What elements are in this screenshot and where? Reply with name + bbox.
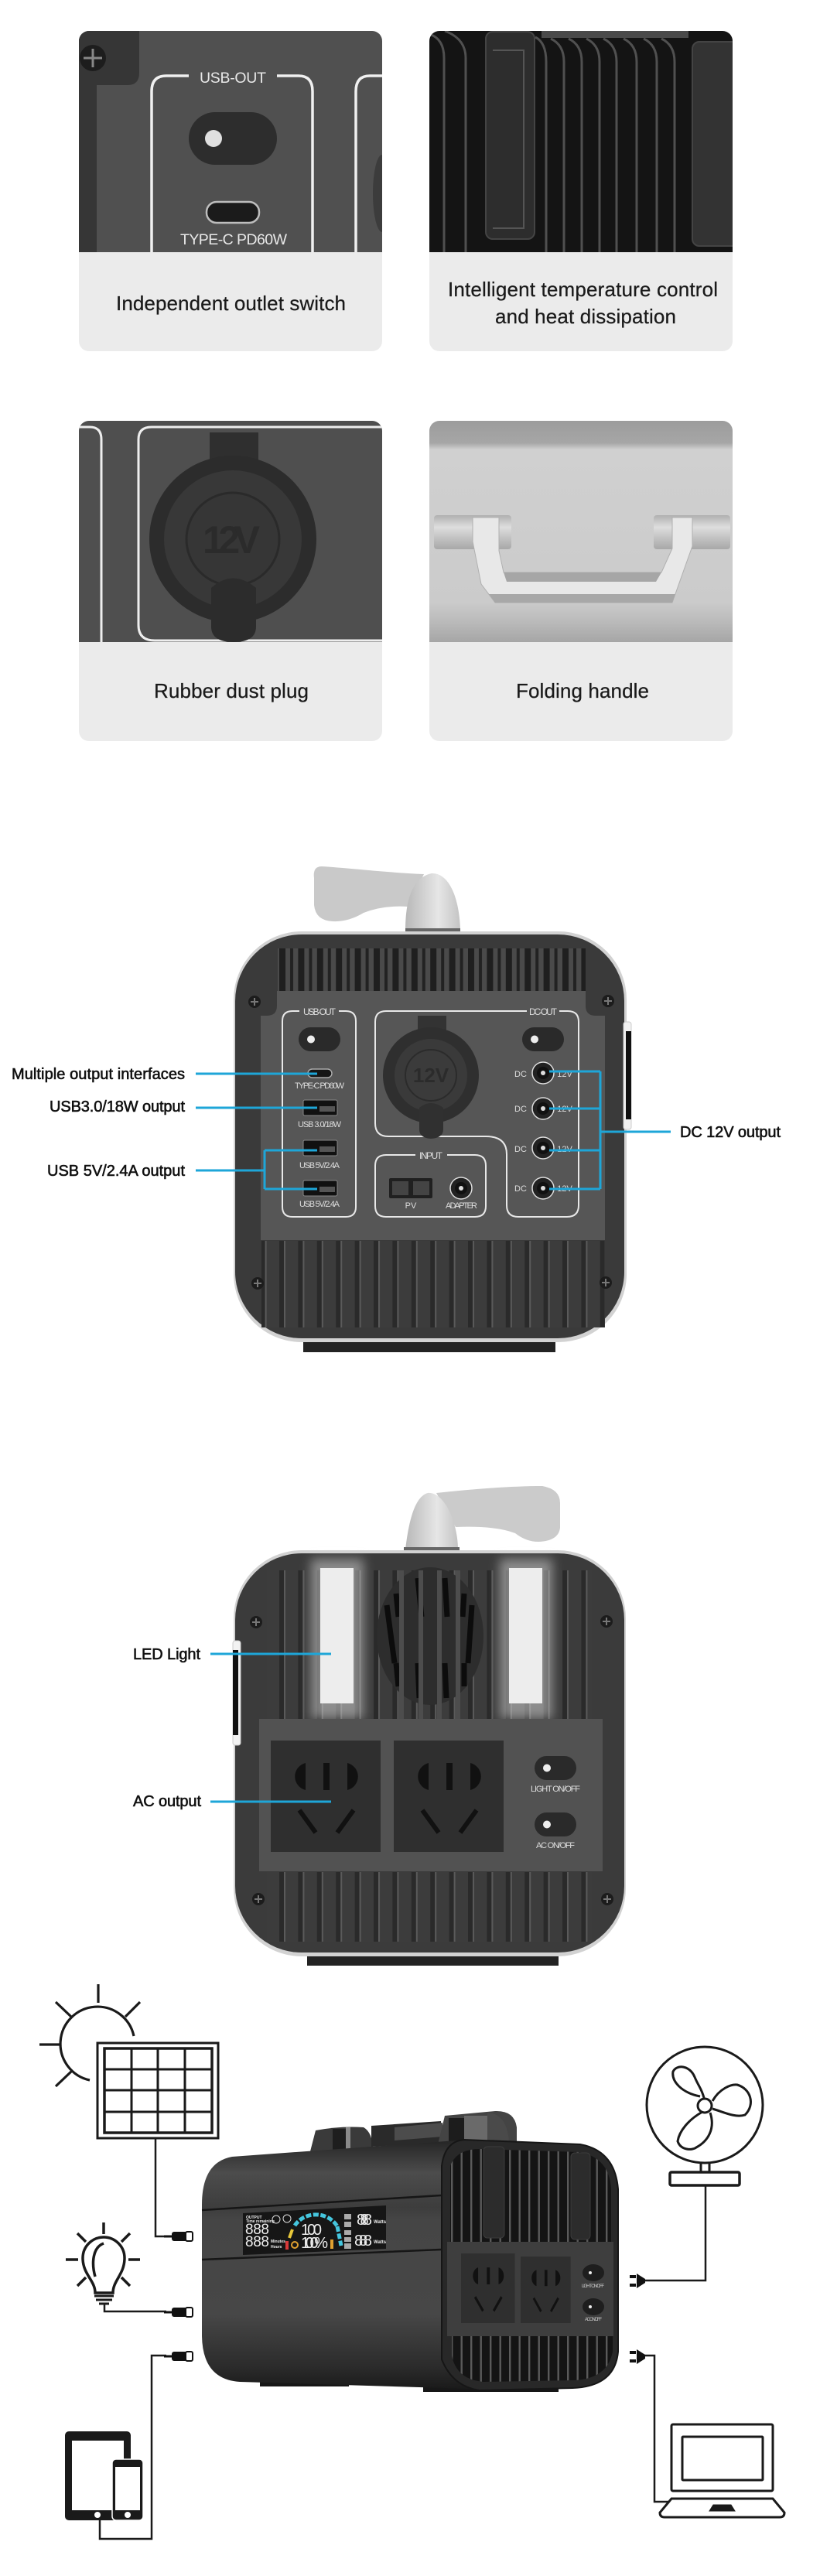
INPUT group: INPUT xyxy=(419,1150,443,1161)
panel: folding handle card xyxy=(429,421,733,741)
label: USB3.0/18W output: USB3.0/18W output xyxy=(50,1098,185,1115)
main body side xyxy=(202,2140,472,2389)
panel: temperature control card: and heat dissipation xyxy=(495,305,676,328)
DC-OUT group: DC xyxy=(514,1145,527,1154)
control panel xyxy=(261,991,605,1240)
LCD display: 888 xyxy=(354,2233,372,2250)
icon: sun xyxy=(39,1984,140,2086)
wire: fan to unit xyxy=(630,2185,706,2288)
bottom fins xyxy=(267,1872,592,1942)
label: LED Light: LED Light xyxy=(133,1646,200,1663)
inner body xyxy=(235,934,624,1338)
side handle xyxy=(624,1022,631,1129)
second AC socket xyxy=(521,2257,571,2323)
bottom foot xyxy=(307,1949,559,1966)
carry handle xyxy=(314,866,460,931)
INPUT group xyxy=(375,1150,486,1217)
panel: independent outlet switch card xyxy=(79,31,391,351)
LCD display: 100% xyxy=(301,2235,328,2252)
LCD display: Watts xyxy=(374,2220,387,2225)
AC socket right xyxy=(394,1741,504,1852)
LCD display: OUTPUT xyxy=(246,2216,262,2220)
switches xyxy=(582,2264,604,2322)
callout lines: front view xyxy=(210,1654,331,1802)
screws xyxy=(250,1615,613,1905)
caption text: Intelligent temperature control xyxy=(448,278,718,301)
INPUT group: PV xyxy=(405,1201,417,1211)
LCD display: 888 xyxy=(245,2222,269,2238)
USB-OUT group: USB-OUT xyxy=(303,1006,337,1017)
LED light right xyxy=(500,1559,552,1719)
caption background xyxy=(429,642,733,741)
USB-OUT group: TYPE-C PD60W xyxy=(295,1081,345,1091)
USB-OUT group: USB 5V/2.4A xyxy=(299,1200,340,1209)
body seams xyxy=(202,2195,441,2260)
top fins xyxy=(267,1570,592,1719)
LCD display: 888 xyxy=(245,2234,269,2250)
control panel xyxy=(259,1719,603,1871)
top handle xyxy=(309,2111,517,2154)
carry handle xyxy=(404,1486,560,1550)
bottom fins xyxy=(261,1241,605,1327)
AC switch: AC ON/OFF xyxy=(536,1841,575,1850)
LCD display xyxy=(243,2205,387,2255)
wire: solar to unit xyxy=(155,2138,193,2241)
lower fins xyxy=(452,2336,613,2382)
photo: USB-OUT close-up xyxy=(79,31,391,252)
product: rear view of power station xyxy=(234,866,631,1352)
photo: 12V rubber plug xyxy=(79,421,382,642)
inner body xyxy=(235,1553,624,1952)
AC sockets xyxy=(461,2253,515,2323)
icon: solar panel xyxy=(97,2043,218,2138)
wire: laptop to unit xyxy=(630,2349,668,2502)
DC-OUT group: 12V xyxy=(557,1145,572,1154)
label: Multiple output interfaces: Multiple output interfaces xyxy=(12,1066,185,1083)
DC-OUT group: 12V xyxy=(557,1184,572,1194)
DC-OUT group: DC xyxy=(514,1070,527,1079)
LED windows xyxy=(483,2147,590,2239)
LCD display: Hours xyxy=(271,2245,282,2250)
wire: bulb to unit xyxy=(104,2304,193,2317)
callout lines: rear view xyxy=(196,1071,671,1189)
switches: LIGHT ON/OFF xyxy=(582,2284,604,2289)
DC-OUT group: DC-OUT xyxy=(529,1006,558,1017)
label: USB 5V/2.4A output: USB 5V/2.4A output xyxy=(47,1163,185,1180)
DC-OUT group: 12V xyxy=(557,1105,572,1114)
caption background xyxy=(79,252,382,351)
panel: rubber dust plug card xyxy=(79,421,382,741)
bottom foot xyxy=(303,1334,555,1352)
switches: AC ON/OFF xyxy=(585,2318,602,2322)
side handle xyxy=(233,1641,241,1745)
top fins xyxy=(278,948,586,992)
USB-OUT group xyxy=(282,1006,356,1217)
LCD display: Time remaining xyxy=(246,2219,275,2224)
caption text: Rubber dust plug xyxy=(154,679,309,702)
DC-OUT group xyxy=(375,1006,579,1217)
LCD display: 888 xyxy=(357,2212,372,2229)
label: AC output: AC output xyxy=(133,1793,201,1810)
DC-OUT group: 12V xyxy=(557,1070,572,1079)
photo: USB-OUT close-up: TYPE-C PD60W xyxy=(180,231,288,248)
photo: folding handle xyxy=(429,421,733,642)
DC-OUT group: DC xyxy=(514,1105,527,1114)
caption background xyxy=(429,252,733,351)
panel: temperature control card xyxy=(429,31,739,351)
product: front view of power station xyxy=(233,1486,626,1966)
light switch: LIGHT ON/OFF xyxy=(531,1785,580,1794)
AC socket left xyxy=(271,1741,381,1852)
photo: heat-dissipation fins xyxy=(429,31,739,252)
icon: fan xyxy=(647,2047,763,2185)
feet xyxy=(260,2379,559,2392)
LCD display: Watts xyxy=(374,2240,387,2245)
AC switch xyxy=(535,1812,576,1850)
light switch xyxy=(531,1756,580,1794)
wire: devices to unit xyxy=(100,2352,193,2539)
outer shell xyxy=(234,931,627,1342)
caption text: Independent outlet switch xyxy=(116,292,346,315)
end cap xyxy=(442,2140,618,2390)
photo: USB-OUT close-up: USB-OUT xyxy=(200,70,266,87)
DC-OUT group: 12V xyxy=(413,1064,449,1087)
icon: laptop xyxy=(660,2424,784,2517)
label: DC 12V output: DC 12V output xyxy=(680,1124,781,1141)
USB-OUT group: USB 5V/2.4A xyxy=(299,1161,340,1170)
caption text: Folding handle xyxy=(516,679,649,702)
INPUT group: ADAPTER xyxy=(446,1201,477,1211)
LCD display: 100 xyxy=(301,2222,322,2239)
LED light left xyxy=(311,1559,364,1719)
screws xyxy=(248,995,614,1290)
fan grille xyxy=(377,1567,483,1719)
USB-OUT group: USB 3.0/18W xyxy=(298,1120,342,1129)
upper fins xyxy=(450,2149,611,2242)
icon: tablet and phone xyxy=(65,2431,143,2520)
caption background xyxy=(79,642,382,741)
outer shell xyxy=(234,1550,626,1956)
product: main power station 3/4 view xyxy=(202,2111,618,2392)
end panel xyxy=(447,2242,613,2336)
DC-OUT group: DC xyxy=(514,1184,527,1194)
icon: light bulb xyxy=(66,2222,140,2304)
LCD display: Minutes xyxy=(271,2239,285,2244)
photo: 12V rubber plug: 12V xyxy=(203,518,261,562)
